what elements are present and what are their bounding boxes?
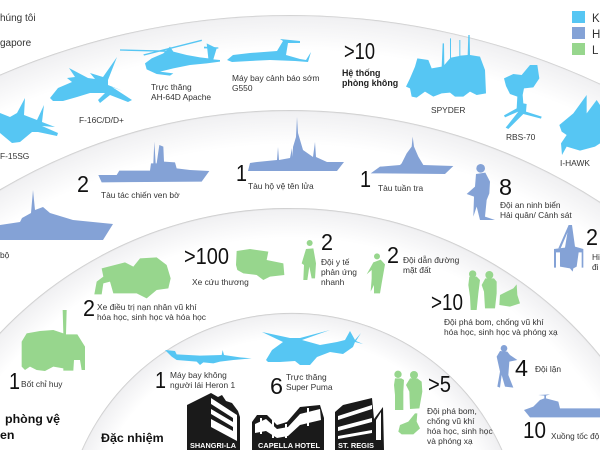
label: G550 (232, 73, 319, 93)
legend: K (592, 13, 600, 25)
number: platform teams: 2 (586, 224, 598, 250)
icon: Shangri-La hotel: SHANGRI-LA (190, 441, 236, 450)
icon: Heron UAV (165, 350, 252, 365)
icon: Super Puma helicopter (262, 330, 363, 365)
icon: diver (497, 345, 517, 388)
label: Apache: Trực thăng (151, 82, 192, 92)
section title: left (0, 412, 60, 442)
number: small bomb teams: >5 (428, 371, 451, 397)
icon: bomb disposal team (468, 270, 520, 310)
label: platform teams (592, 252, 600, 272)
icon: Apache helicopter (120, 40, 220, 76)
label: small bomb teams: hóa học, sinh học (427, 426, 493, 436)
label: littoral ship: Tàu tác chiến ven bờ (101, 190, 180, 200)
icon: G550 aircraft (227, 39, 311, 62)
label: bomb teams (444, 317, 558, 337)
icon: platform (554, 225, 583, 272)
label: G550: G550 (232, 83, 253, 93)
icon: frigate (248, 117, 344, 171)
legend (572, 11, 600, 57)
number: patrol ship: 1 (360, 166, 371, 192)
label: ambulances: Xe cứu thương (192, 277, 249, 287)
icon: F-15SG (0, 98, 58, 143)
icon: St. Regis hotel: ST. REGIS (338, 441, 374, 450)
label: platform teams: đi (592, 262, 599, 272)
number: Super Puma: 6 (270, 373, 283, 399)
label: marine security: Đội an ninh biển (500, 200, 561, 210)
icon: medic soldier (302, 240, 316, 280)
number: command post: 1 (9, 368, 20, 394)
icon: SPYDER (406, 35, 486, 98)
legend: L (592, 45, 599, 57)
section title: left: en (0, 428, 14, 442)
header text: gapore (0, 38, 32, 49)
number: bomb teams: >10 (431, 289, 463, 315)
label: small bomb teams: và phóng xạ (427, 436, 473, 446)
number: speed boats: 10 (523, 417, 546, 443)
number: ground guides: 2 (387, 242, 399, 268)
icon: Shangri-La hotel (187, 393, 240, 450)
label: Super Puma (286, 372, 333, 392)
label: bomb teams: hóa học, sinh học và phóng xạ (444, 327, 558, 337)
number: medical teams: 2 (321, 229, 333, 255)
label: I-HAWK: I-HAWK (560, 158, 590, 168)
label: marine security (500, 200, 572, 220)
number: frigate: 1 (236, 160, 247, 186)
label: ground guides: Đội dẫn đường (403, 255, 460, 265)
icon: patrol ship (371, 137, 453, 174)
label: marine security: Hải quân/ Cảnh sát (500, 210, 572, 220)
header text: húng tôi (0, 13, 36, 24)
label: air defence: phòng không (342, 78, 398, 88)
label: Apache: AH-64D Apache (151, 92, 211, 102)
icon: littoral ship (98, 142, 209, 182)
label: G550: Máy bay cảnh báo sớm (232, 73, 319, 83)
icon: F-16 (50, 57, 132, 103)
label: UAV (170, 370, 235, 390)
label: speed boats: Xuồng tốc độ (551, 432, 600, 441)
label: treatment trucks (97, 302, 206, 322)
icon: navy soldier (467, 164, 495, 220)
section title: special: Đặc nhiệm (101, 431, 164, 445)
label: air defence: Hệ thống (342, 68, 380, 78)
icon: bomb disposal team small (394, 371, 422, 434)
icon: I-HAWK (559, 95, 600, 155)
label: medical teams (321, 257, 357, 287)
number: ambulances: >100 (184, 243, 229, 269)
icon: speed boat (524, 394, 600, 417)
label: F-16: F-16C/D/D+ (79, 115, 124, 125)
section title: left: phòng vệ (5, 412, 60, 426)
label: medical teams: phản ứng (321, 267, 357, 277)
icon: RBS-70 (504, 65, 542, 129)
label: air defence (342, 68, 398, 88)
number: littoral ships: 2 (77, 171, 89, 197)
icon: command post (22, 310, 85, 371)
number: treatment trucks: 2 (83, 295, 95, 321)
label: patrol ship: Tàu tuần tra (378, 183, 424, 193)
icon: Capella hotel (252, 405, 324, 450)
number: divers: 4 (515, 355, 528, 381)
icon: Capella hotel: CAPELLA HOTEL (258, 441, 320, 450)
label: bomb teams: Đội phá bom, chống vũ khí (444, 317, 544, 327)
label: small bomb teams (427, 406, 493, 446)
label: ground guides: mặt đất (403, 265, 432, 275)
label: treatment trucks: hóa học, sinh học và hóa học (97, 312, 206, 322)
icon: left ship (0, 190, 113, 240)
header text (0, 13, 36, 49)
label: Apache (151, 82, 211, 102)
label: small bomb teams: Đội phá bom, (427, 406, 477, 416)
label: SPYDER: SPYDER (431, 105, 465, 115)
label: small bomb teams: chống vũ khí (427, 416, 475, 426)
number: UAV: 1 (155, 367, 166, 393)
number: air defence: >10 (344, 38, 375, 64)
label: medical teams: Đội y tế (321, 257, 350, 267)
label: Super Puma: Trực thăng (286, 372, 327, 382)
label: F-15SG: F-15SG (0, 151, 29, 161)
label: ground guides (403, 255, 460, 275)
label: frigate: Tàu hộ vệ tên lửa (248, 181, 314, 191)
label: command post: Bốt chỉ huy (21, 379, 63, 389)
label: UAV: Máy bay không (170, 370, 227, 380)
label: platform teams: Hi (592, 252, 600, 262)
label: left ship: bộ (0, 250, 10, 260)
label: Super Puma: Super Puma (286, 382, 333, 392)
label: treatment trucks: Xe điều trị nạn nhân vũ khí (97, 302, 197, 312)
label: UAV: người lái Heron 1 (170, 380, 235, 390)
icon: St. Regis hotel (335, 398, 384, 450)
number: marine security: 8 (499, 174, 512, 200)
icon: ambulance (236, 249, 284, 280)
icon: guide soldier (367, 253, 385, 293)
label: RBS-70: RBS-70 (506, 132, 536, 142)
label: divers: Đội lặn (535, 364, 561, 374)
icon: treatment truck (94, 257, 171, 298)
label: medical teams: nhanh (321, 277, 345, 287)
